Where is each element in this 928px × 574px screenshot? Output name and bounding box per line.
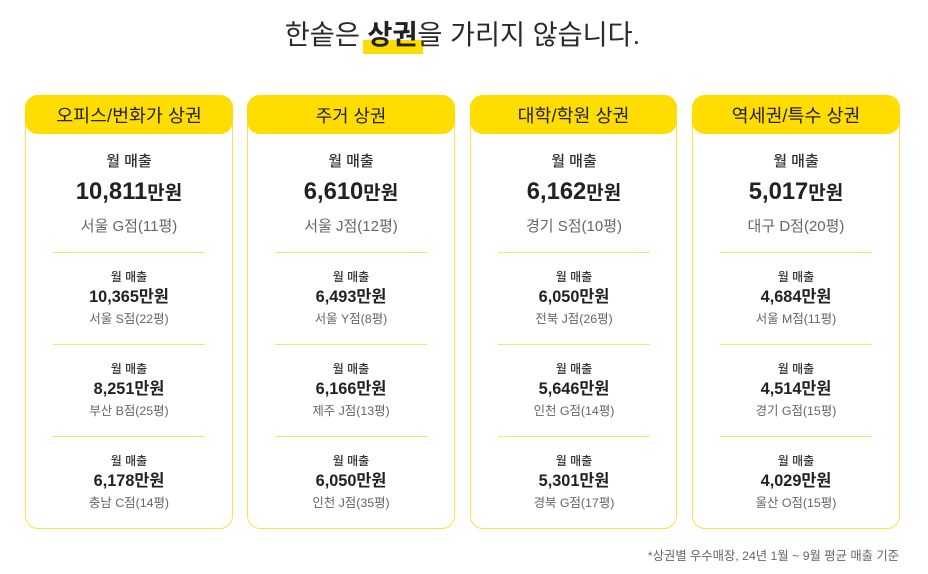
store 2: 서울 Y점(8평) [315, 312, 387, 326]
store 4 [756, 454, 836, 510]
store 3: 5,646만원 [539, 380, 609, 398]
panel: station and special district [692, 95, 900, 529]
store 4 [312, 454, 390, 510]
store 4: 월 매출 [556, 454, 592, 468]
store 3: 8,251만원 [94, 380, 164, 398]
store 3 [89, 362, 169, 418]
store 3 [756, 362, 836, 418]
store 2: 전북 J점(26평) [535, 312, 613, 326]
store 3: 경기 G점(15평) [756, 404, 836, 418]
store 2 [535, 270, 613, 326]
store 2: 월 매출 [333, 270, 369, 284]
top store: 월 매출 [773, 153, 819, 170]
store 4: 월 매출 [111, 454, 147, 468]
store 4: 충남 C점(14평) [89, 496, 169, 510]
store 2: 월 매출 [111, 270, 147, 284]
store 3: 6,166만원 [316, 380, 386, 398]
store 2: 월 매출 [778, 270, 814, 284]
store 4: 4,029만원 [761, 472, 831, 490]
panel: residential district [247, 95, 455, 529]
store 4: 인천 J점(35평) [312, 496, 390, 510]
panel heading [247, 95, 455, 134]
store 3: 월 매출 [333, 362, 369, 376]
top store [748, 153, 844, 235]
store 2 [756, 270, 836, 326]
panel: university district [470, 95, 677, 529]
store 4 [89, 454, 169, 510]
store 2: 6,050만원 [539, 288, 609, 306]
title highlight [363, 40, 423, 54]
top store: 서울 J점(12평) [304, 218, 398, 235]
panel heading: 역세권/특수 상권 [732, 105, 860, 126]
panel heading [692, 95, 900, 134]
store 2 [315, 270, 387, 326]
top store [304, 153, 398, 235]
panel heading: 주거 상권 [316, 106, 386, 126]
top store [76, 153, 182, 235]
store 2: 서울 S점(22평) [89, 312, 169, 326]
footnote: *상권별 우수매장, 24년 1월 ~ 9월 평균 매출 기준 [648, 549, 899, 563]
store 4 [534, 454, 614, 510]
store 4: 울산 O점(15평) [756, 496, 836, 510]
store 3: 월 매출 [778, 362, 814, 376]
store 4: 월 매출 [778, 454, 814, 468]
store 3: 월 매출 [556, 362, 592, 376]
panel heading: 대학/학원 상권 [518, 105, 629, 126]
store 2: 6,493만원 [316, 288, 386, 306]
store 2 [89, 270, 169, 326]
top store: 경기 S점(10평) [526, 218, 622, 235]
store 3: 부산 B점(25평) [89, 404, 169, 418]
top store: 대구 D점(20평) [748, 218, 844, 235]
panel heading [470, 95, 677, 134]
store 2: 서울 M점(11평) [756, 312, 836, 326]
store 4: 5,301만원 [539, 472, 609, 490]
store 3 [534, 362, 614, 418]
title: 한솥은 상권을 가리지 않습니다. [285, 19, 640, 50]
store 3 [312, 362, 390, 418]
store 3: 제주 J점(13평) [312, 404, 390, 418]
top store [526, 153, 622, 235]
top store: 10,811만원 [76, 178, 182, 205]
store 4: 6,178만원 [94, 472, 164, 490]
store 3: 월 매출 [111, 362, 147, 376]
top store: 6,610만원 [304, 178, 398, 205]
top store: 월 매출 [328, 153, 374, 170]
store 4: 6,050만원 [316, 472, 386, 490]
top store: 월 매출 [551, 153, 597, 170]
store 2: 4,684만원 [761, 288, 831, 306]
panel: office district [25, 95, 233, 529]
panel heading: 오피스/번화가 상권 [56, 105, 202, 126]
panel heading [25, 95, 233, 134]
store 3: 4,514만원 [761, 380, 831, 398]
store 2: 월 매출 [556, 270, 592, 284]
store 4: 월 매출 [333, 454, 369, 468]
top store: 월 매출 [106, 153, 152, 170]
store 4: 경북 G점(17평) [534, 496, 614, 510]
store 3: 인천 G점(14평) [534, 404, 614, 418]
top store: 5,017만원 [749, 178, 843, 205]
top store: 6,162만원 [527, 178, 621, 205]
top store: 서울 G점(11평) [81, 218, 177, 235]
store 2: 10,365만원 [89, 288, 169, 306]
